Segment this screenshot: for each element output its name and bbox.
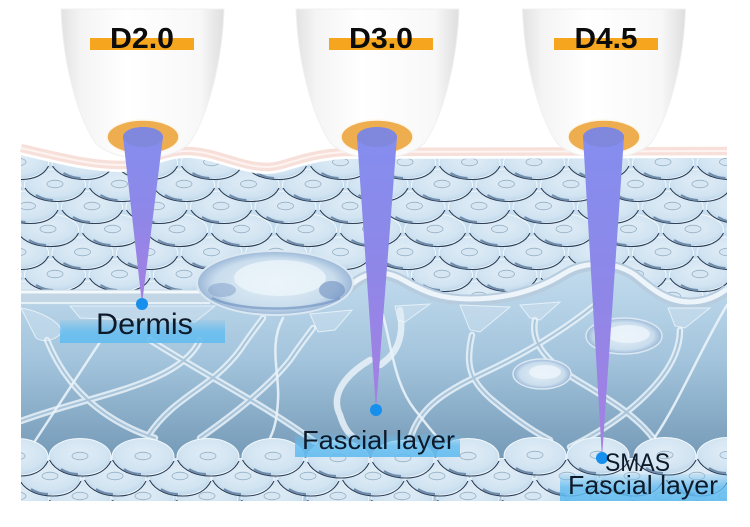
label: SMAS Fascial layer: Fascial layer	[568, 470, 718, 500]
icon: medium water bubble	[586, 318, 662, 354]
energy beam: D4.5	[583, 127, 624, 458]
dermis tube	[21, 264, 727, 303]
label band: Fascial layer	[295, 434, 460, 457]
panel: lower cell layer	[21, 437, 727, 501]
orange label bar D4.5	[554, 38, 658, 50]
heading D3.0: D3.0	[349, 23, 413, 55]
icon: small water bubble	[513, 359, 571, 389]
depth marker: Dermis	[136, 298, 148, 310]
label: SMAS: SMAS	[605, 449, 670, 477]
heading D2.0: D2.0	[110, 23, 174, 55]
label band: Dermis	[60, 320, 225, 343]
orange ring D2.0	[107, 120, 179, 154]
icon: large water bubble	[197, 251, 353, 315]
label band: SMAS Fascial layer	[560, 474, 727, 501]
orange label bar D2.0	[90, 38, 194, 50]
energy beam: D3.0	[357, 127, 397, 410]
orange ring D3.0	[341, 120, 413, 154]
label: Dermis: Dermis	[96, 308, 193, 341]
lower tissue background	[21, 265, 727, 470]
treatment head: D3.0	[296, 9, 459, 158]
treatment head: D4.5	[522, 9, 686, 158]
label: Fascial layer: Fascial layer	[302, 425, 455, 455]
energy beam: D2.0	[123, 127, 163, 304]
orange label bar D3.0	[329, 38, 433, 50]
skin surface band	[21, 148, 727, 168]
orange ring D4.5	[568, 120, 640, 154]
depth marker: SMAS	[596, 452, 608, 464]
heading D4.5: D4.5	[574, 23, 638, 55]
fibre strands	[21, 305, 727, 447]
panel: upper cell layer	[21, 155, 727, 298]
treatment head: D2.0	[61, 9, 224, 158]
fibre anchors	[21, 302, 710, 340]
depth marker: Fascial layer	[370, 404, 382, 416]
